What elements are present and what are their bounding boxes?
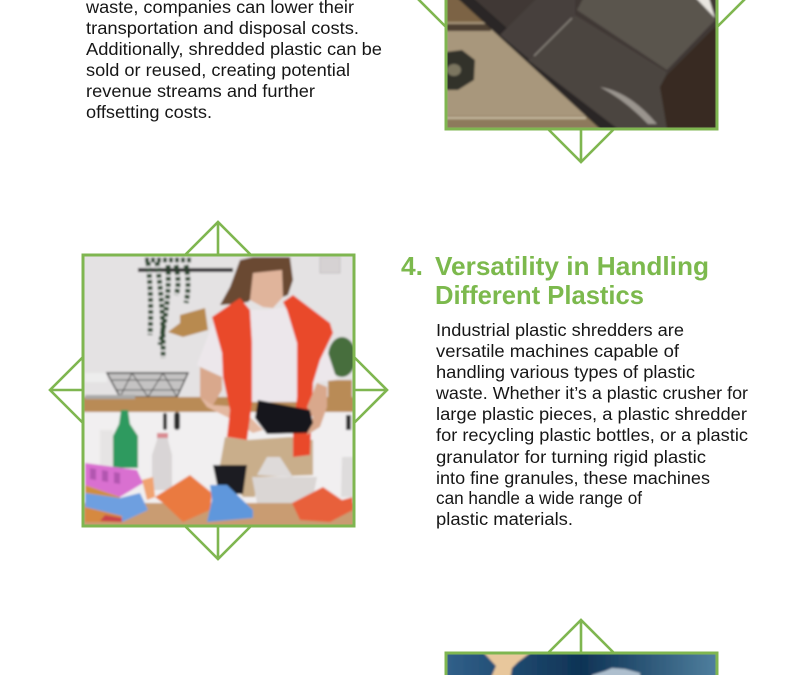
body text: cost savings paragraph: revenue streams and further [86, 81, 315, 101]
body text: versatility paragraph: waste. Whether it’s a plastic crusher for [435, 383, 748, 403]
cabinets [83, 412, 354, 512]
orange cardigan right [283, 295, 333, 457]
tray base [85, 507, 122, 522]
body text: cost savings paragraph [85, 0, 382, 122]
photo panel: sky with clouds [446, 620, 717, 675]
wallet edge [454, 0, 620, 129]
wire basket [107, 373, 188, 397]
body text: cost savings paragraph: Additionally, shredded plastic can be [86, 39, 382, 59]
body text: cost savings paragraph: sold or reused, creating potential [86, 60, 350, 80]
photo frame: sky [446, 653, 717, 675]
hair [220, 257, 293, 305]
wall shelf [138, 268, 233, 272]
right forearm [307, 383, 327, 435]
blue plastic bag [207, 485, 253, 522]
clear bottle [152, 433, 172, 490]
heading: 4. Versatility in Handling Different Plastics [401, 251, 709, 310]
photo frame: wallet [446, 0, 717, 129]
frame on wall [320, 257, 340, 273]
body text: versatility paragraph: can handle a wide range of [436, 488, 642, 508]
pink egg tray [85, 463, 143, 497]
photo panel: leather wallet on wood [417, 0, 746, 162]
faint bottle [100, 430, 113, 467]
photo: wallet [446, 0, 717, 129]
peach plastic bag [142, 477, 155, 500]
body text: versatility paragraph: plastic materials. [436, 509, 573, 529]
body text: cost savings paragraph: transportation and disposal costs. [86, 18, 359, 38]
face [250, 270, 283, 308]
body text: versatility paragraph [435, 320, 748, 529]
body text: versatility paragraph: versatile machines capable of [436, 341, 679, 361]
black bag [255, 400, 313, 434]
heading: 4. Versatility in Handling Different Plastics: Different Plastics [435, 280, 644, 310]
clear container dome [257, 457, 293, 477]
body text: versatility paragraph: handling various types of plastic [436, 362, 695, 382]
green bottle [113, 410, 138, 468]
potted herb [328, 337, 356, 377]
body text: cost savings paragraph: offsetting costs. [86, 102, 212, 122]
cardboard strip [85, 485, 120, 499]
body text: versatility paragraph: Industrial plastic shredders are [436, 320, 684, 340]
body text: versatility paragraph: for recycling plastic bottles, or a plastic [436, 425, 748, 445]
upper left arm [200, 367, 222, 405]
clear plastic container [252, 477, 317, 503]
photo frame: woman [83, 255, 354, 526]
trousers [220, 437, 313, 497]
diamond frame accents: woman photo [50, 222, 387, 559]
table [83, 503, 354, 527]
right bottle [341, 457, 352, 498]
diamond frame accents: wallet photo [417, 0, 746, 162]
counter [83, 397, 354, 412]
body text: versatility paragraph: large plastic pieces, a plastic shredder [436, 404, 747, 424]
t-shirt [214, 312, 336, 404]
body text: versatility paragraph: into fine granules, these machines [436, 468, 710, 488]
heading: 4. Versatility in Handling Different Plastics: 4. [401, 251, 423, 281]
wall socket [86, 374, 106, 381]
body text: versatility paragraph: granulator for turning rigid plastic [436, 447, 706, 467]
orange plastic bag [155, 475, 212, 522]
wallet base [474, 0, 716, 86]
left forearm [200, 397, 263, 433]
hanging plant [145, 260, 193, 358]
black cup [213, 465, 247, 494]
orange cardigan left [212, 298, 252, 440]
diamond frame accent: sky photo [548, 620, 614, 653]
photo panel: woman sorting plastic waste [50, 222, 387, 559]
blue egg tray [85, 493, 148, 522]
red plastic bag [292, 487, 353, 522]
cutting board [168, 308, 208, 337]
photo: sky [446, 653, 717, 675]
photo: woman with plastics in kitchen [83, 255, 356, 527]
heading: 4. Versatility in Handling Different Plastics: Versatility in Handling [435, 251, 709, 281]
